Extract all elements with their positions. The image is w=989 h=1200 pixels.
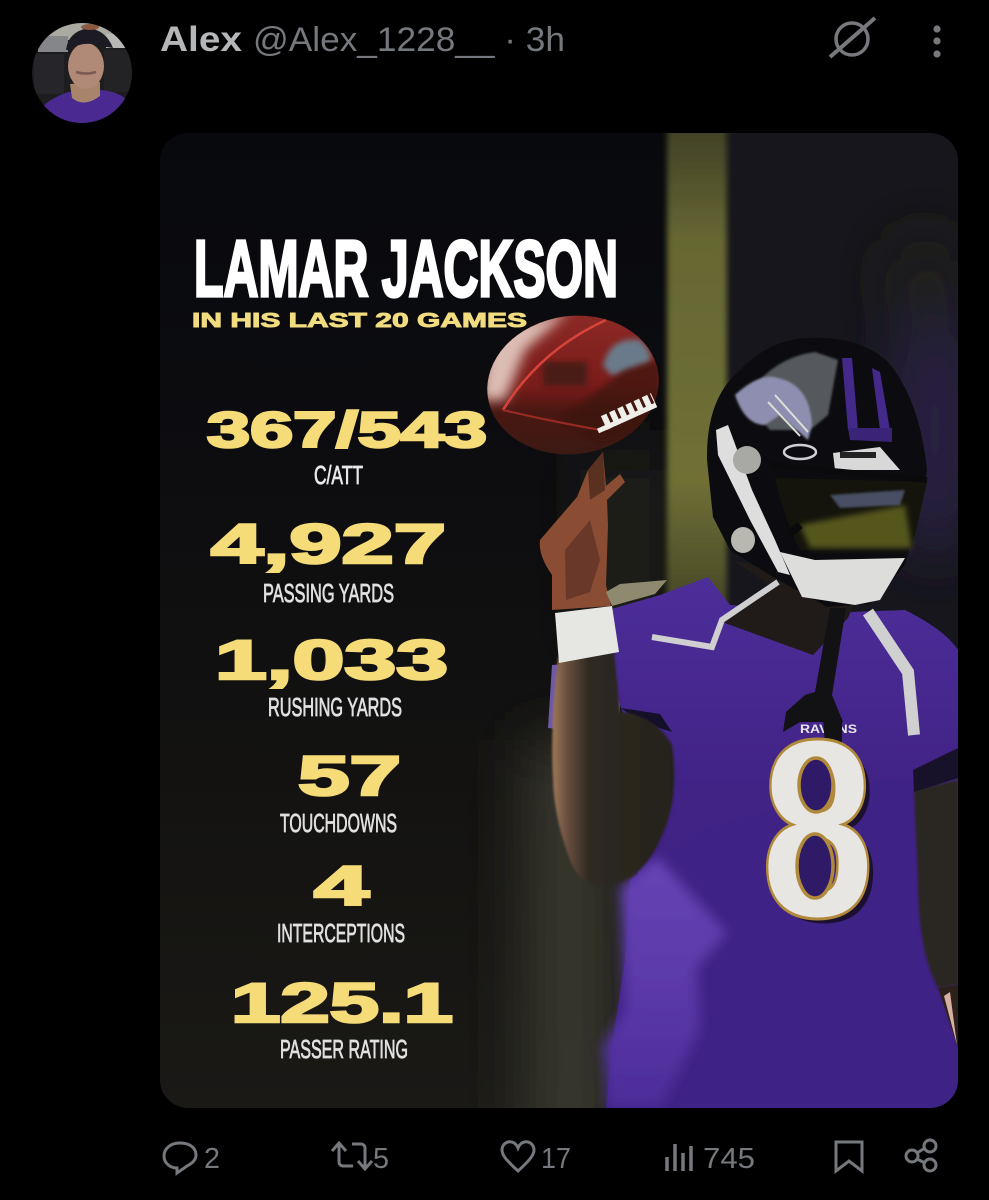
highlight bbox=[480, 310, 570, 400]
author name: Alex bbox=[160, 20, 243, 59]
neck bbox=[722, 560, 860, 655]
icon: repost bbox=[332, 1143, 372, 1169]
stat: interceptions: INTERCEPTIONS bbox=[277, 918, 405, 948]
icon: like bbox=[502, 1142, 534, 1171]
seams bbox=[503, 320, 606, 410]
jersey lower body bbox=[606, 780, 958, 1108]
visor bbox=[910, 482, 927, 548]
stat: passing yards: PASSING YARDS bbox=[263, 578, 394, 608]
stat: passing yards: 4,927 bbox=[211, 512, 446, 575]
jersey number: 8 bbox=[762, 689, 873, 968]
collar strap right bbox=[868, 612, 914, 735]
white facemask pieces bbox=[716, 425, 790, 575]
stat: interceptions bbox=[277, 854, 405, 948]
subheading: IN HIS LAST 20 GAMES bbox=[192, 310, 527, 332]
goal post bbox=[663, 133, 730, 604]
shoulder trim bbox=[606, 580, 667, 606]
stat: completions: C/ATT bbox=[314, 460, 363, 490]
avatar bbox=[30, 20, 134, 126]
panel: infographic card bbox=[160, 133, 958, 1108]
throwing arm bbox=[552, 650, 674, 885]
stat: touchdowns bbox=[280, 744, 401, 838]
icon: more menu bbox=[933, 25, 941, 58]
stat: passer rating bbox=[231, 971, 453, 1064]
left sleeve trim bbox=[621, 708, 672, 732]
helmet stripes bbox=[842, 358, 858, 430]
jersey torso bbox=[608, 577, 958, 1052]
stat: passer rating: 125.1 bbox=[231, 971, 453, 1034]
hand bbox=[540, 452, 625, 610]
icon: reply bbox=[164, 1143, 196, 1173]
dark panel bbox=[543, 362, 587, 386]
action bar bbox=[164, 1140, 936, 1173]
right sleeve trim bbox=[913, 748, 958, 792]
collar strap left bbox=[652, 582, 778, 647]
views count: 745 bbox=[703, 1143, 755, 1175]
reply count: 2 bbox=[204, 1143, 220, 1175]
post header bbox=[160, 20, 565, 59]
right hip skin bbox=[938, 985, 958, 1048]
mouthpiece tag bbox=[823, 718, 842, 745]
wristband bbox=[555, 606, 619, 663]
stat: rushing yards: RUSHING YARDS bbox=[268, 692, 402, 722]
main heading: LAMAR JACKSON bbox=[194, 224, 618, 313]
stat: passing yards bbox=[211, 512, 446, 608]
stat: interceptions: 4 bbox=[314, 854, 369, 917]
stat: rushing yards: 1,033 bbox=[215, 628, 448, 691]
face mask bar bbox=[834, 468, 928, 483]
icon: grok slash circle bbox=[830, 18, 875, 57]
right arm bbox=[914, 780, 958, 988]
icon: share bbox=[906, 1150, 918, 1162]
handle and time: @Alex_1228__ · 3h bbox=[253, 21, 565, 59]
jersey number bbox=[766, 738, 874, 924]
stat: completions bbox=[207, 402, 487, 490]
icon: views bbox=[667, 1144, 691, 1171]
repost count: 5 bbox=[373, 1143, 389, 1175]
chin strap and mouthpiece bbox=[783, 608, 846, 732]
raven logo bbox=[735, 377, 812, 440]
icon: bookmark bbox=[836, 1142, 862, 1171]
like count: 17 bbox=[541, 1143, 571, 1175]
sleeve edge behind arm bbox=[548, 664, 620, 728]
helmet shell bbox=[707, 338, 927, 607]
laces bbox=[598, 405, 656, 431]
shell reflection bbox=[760, 351, 839, 432]
stat: rushing yards bbox=[215, 628, 448, 722]
player bbox=[540, 338, 958, 1108]
stat: completions: 367/543 bbox=[207, 402, 487, 458]
stat: passer rating: PASSER RATING bbox=[280, 1034, 408, 1064]
logo bbox=[603, 340, 650, 376]
football bbox=[487, 316, 659, 454]
title bbox=[192, 224, 618, 332]
stat: touchdowns: 57 bbox=[298, 744, 401, 807]
stadium background bbox=[525, 100, 985, 1160]
team wordmark: RAVENS bbox=[800, 722, 857, 736]
undershirt highlight bbox=[603, 857, 727, 1108]
helmet clips bbox=[733, 446, 761, 474]
helmet bbox=[707, 338, 927, 607]
stat: touchdowns: TOUCHDOWNS bbox=[280, 808, 397, 838]
jersey number: 8 bbox=[768, 695, 879, 974]
